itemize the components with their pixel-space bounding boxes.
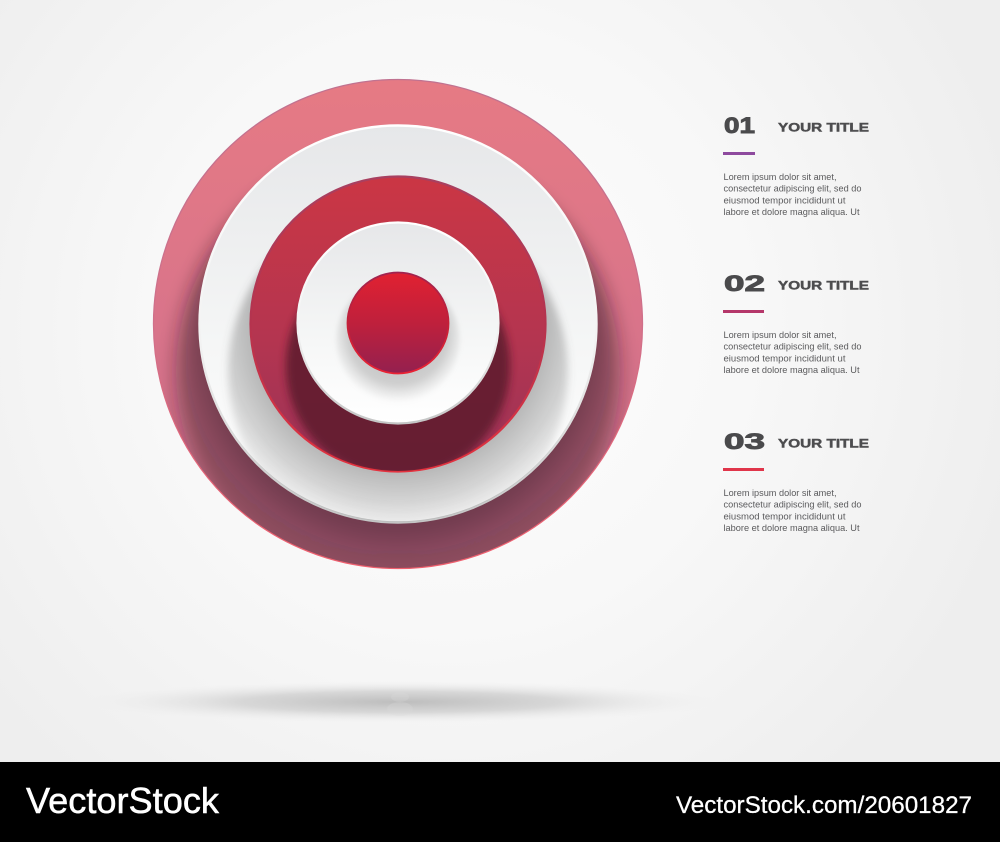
rule 01 [723,152,755,155]
text 02: consectetur adipiscing elit, sed do [724,342,862,352]
text 02: Lorem ipsum dolor sit amet, [724,330,836,341]
brand name: VectorStock [26,780,220,821]
footer banner [0,762,1000,842]
rule 03 [723,468,764,471]
text 03: Lorem ipsum dolor sit amet, [724,488,836,499]
image id: VectorStock.com/20601827 [676,792,972,819]
item 01 [723,113,869,218]
text 01: consectetur adipiscing elit, sed do [724,184,862,194]
rule 02 [723,310,764,313]
center disc (red) [348,272,448,374]
text 03: consectetur adipiscing elit, sed do [724,500,862,510]
outer ring [154,80,642,594]
text 01 [724,172,862,218]
floor shadow [80,681,720,723]
second disc (white) [200,126,596,542]
title 02: YOUR TITLE [778,280,869,292]
number 01: 01 [724,113,755,138]
text 02: eiusmod tempor incididunt ut [724,354,846,364]
item 02 [723,271,869,376]
number 03: 03 [724,429,765,454]
number 02: 02 [724,271,765,296]
third ring (red) [250,176,546,478]
text 03: eiusmod tempor incididunt ut [724,512,846,522]
text 01: labore et dolore magna aliqua. Ut [724,207,860,218]
text 03: labore et dolore magna aliqua. Ut [724,523,860,534]
title 03: YOUR TITLE [778,438,869,450]
target diagram [154,80,642,594]
text 01: Lorem ipsum dolor sit amet, [724,172,836,183]
text 01: eiusmod tempor incididunt ut [724,196,846,206]
text 03 [724,488,862,534]
item 03 [723,429,869,534]
title 01: YOUR TITLE [778,122,869,134]
text 02 [724,330,862,376]
fourth disc (white) [298,222,498,424]
text 02: labore et dolore magna aliqua. Ut [724,365,860,376]
